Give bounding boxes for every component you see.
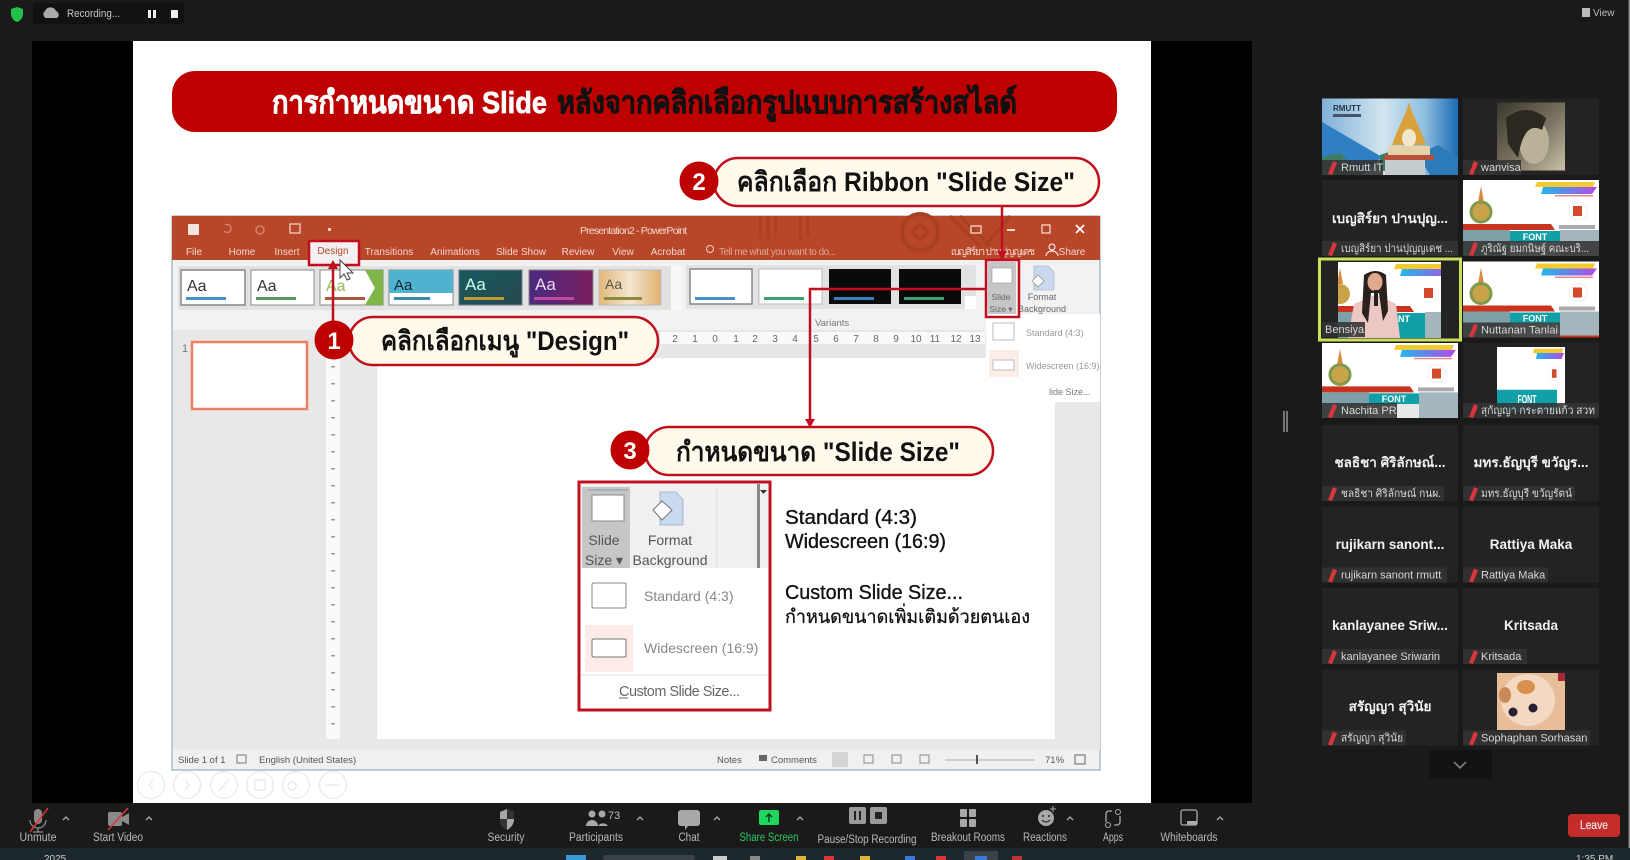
Slide size explanation text: กำหนดขนาดเพิ่มเติมด้วยตนเอง [785,603,1030,628]
horizontal ruler: 2 [672,334,678,345]
participant: sukanya: สุกัญญา กระตายแก้ว สวท [1481,405,1595,417]
cat photo [1497,673,1565,730]
participants button [569,810,643,844]
ribbon: Variants [815,318,849,329]
ribbon Slide Size button: Slide [992,292,1011,302]
participant: wanvisa: wanvisa [1480,162,1522,174]
title bar and tabs: Transitions [365,247,413,258]
red highlight around Slide Size button [986,260,1019,317]
title banner [172,71,1117,132]
step number 2: 2 [692,169,706,196]
horizontal ruler: 12 [950,334,962,345]
window controls [971,226,981,233]
participant: chonthicha: ชลธิชา ศิริลักษณ์... [1334,454,1446,470]
recording status chip [11,3,184,24]
theme thumbnails: Aa [535,275,556,294]
icon: pause [148,10,156,18]
variant thumbnails [690,269,976,309]
participants button: Participants [569,832,623,844]
icon: stop [171,10,178,18]
participant: Rattiya Maka: Rattiya Maka [1481,570,1546,582]
gallery next page button [1429,750,1492,779]
participants button: 73 [608,810,620,822]
Slide size explanation text: Widescreen (16:9) [785,531,946,553]
participant: Nachita PR: FONT [1382,394,1407,404]
chat button: Chat [678,832,700,844]
arrow: callout 1 to Design tab [328,260,338,325]
participant: Rmutt IT: RMUTT [1333,104,1361,113]
participant: rmutt thanyaburi: มทร.ธัญบุรี ขวัญรัตน์ [1481,487,1572,500]
title bar and tabs: View [612,247,635,258]
status bar: Slide 1 of 1 [178,755,226,766]
ribbon Format Background button [1018,266,1066,314]
ribbon Slide Size button: Size ▾ [989,304,1013,314]
security button [488,809,525,844]
theme thumbnails [181,270,661,305]
leave button: Leave [1580,820,1608,832]
callout 3: กำหนดขนาด "Slide Size" [676,437,960,467]
title bar and tabs: Home [229,247,256,258]
participant: phuritat [1463,180,1599,256]
title bar and tabs: Slide Show [496,247,547,258]
enlarged Slide Size menu [579,482,770,710]
reactions button: Reactions [1023,832,1067,844]
participant: Nuttanan Tanlai: FONT [1523,314,1548,324]
participant: kanlayanee Sriwarin: kanlayanee Sriw... [1332,618,1448,633]
horizontal ruler: 5 [813,334,819,345]
icon: save [188,224,199,235]
participant: kanlayanee Sriwarin [1322,588,1458,664]
slide size dropdown: lide Size... [1049,387,1091,397]
PowerPoint window screenshot [172,214,1100,770]
start video button [93,808,152,844]
theme thumbnails: Aa [465,275,486,294]
breakout rooms button: Breakout Rooms [931,832,1005,844]
shared screen area [32,41,1252,803]
participant: rujikarn sanont [1322,506,1458,582]
participant: chonthicha [1322,425,1458,501]
participant: phuritat: ภูริณัฐ ยมกนิษฐ์ คณะบริ... [1481,242,1589,255]
horizontal ruler: 6 [833,334,839,345]
slide size dropdown: Widescreen (16:9) [1026,361,1100,371]
icon: encryption shield [11,7,23,22]
share screen button [740,810,803,844]
participant: Nuttanan Tanlai: Nuttanan Tanlai [1481,324,1558,336]
title bar and tabs: Review [562,247,595,258]
slide size dropdown [986,314,1100,402]
step number 1: 1 [327,328,341,355]
title bar and tabs: Insert [274,247,300,258]
enlarged Slide Size menu: Custom Slide Size... [619,684,740,700]
security button: Security [488,832,525,844]
participant: rmutt thanyaburi [1463,425,1599,501]
title bar and tabs: File [186,247,202,258]
apps button: Apps [1103,832,1123,844]
horizontal ruler: 11 [930,334,941,345]
participant: Nachita PR [1322,343,1458,418]
participant: Bensiya (active speaker): NT [1398,314,1410,324]
theme thumbnails: Aa [187,278,207,295]
whiteboards button [1160,810,1223,844]
title banner: การกำหนดขนาด Slide [272,85,547,120]
ribbon [173,260,1099,330]
meeting toolbar [20,806,1620,846]
apps button [1103,810,1123,844]
status bar: Notes [717,755,742,766]
participant: chonthicha: ชลธิชา ศิริลักษณ์ กนผ. [1341,487,1441,500]
ribbon Format Background button: Format [1028,292,1057,302]
start video button: Start Video [93,832,143,844]
horizontal ruler: 1 [733,334,739,345]
whiteboards button: Whiteboards [1160,832,1218,844]
status bar [173,739,1099,769]
participant: Bensiya (active speaker) [1320,259,1460,340]
participant: Nachita PR: Nachita PR [1341,405,1397,417]
participant: Sophaphan Sorhasan: Sophaphan Sorhasan [1481,732,1587,744]
ribbon Format Background button: Background [1018,304,1066,314]
horizontal ruler: 9 [893,334,899,345]
horizontal ruler: 4 [792,334,798,345]
status bar: Comments [771,755,817,766]
horizontal ruler: 1 [692,334,698,345]
ribbon Slide Size button [988,262,1016,316]
arrow: Slide Size button to callout 3 [805,289,986,428]
participant: rujikarn sanont: rujikarn sanont... [1336,537,1444,552]
step number 1 [314,320,354,360]
Slide size explanation text [785,507,1030,628]
participant: Rattiya Maka [1463,506,1599,582]
step number 2 [680,162,718,200]
title bar and tabs: Animations [430,247,480,258]
status bar: 71% [1045,755,1065,766]
participant gallery [1320,98,1599,779]
Slide size explanation text: Custom Slide Size... [785,582,963,604]
callout 2 [680,158,1099,206]
pause and stop recording button: Pause/Stop Recording [818,834,916,846]
title bar and tabs: Share [1059,247,1086,258]
enlarged Slide Size menu: Standard (4:3) [644,588,734,604]
pause and stop recording button [818,807,916,846]
view button [1582,8,1615,19]
enlarged Slide Size menu: Widescreen (16:9) [644,640,758,656]
participant: Rattiya Maka: Rattiya Maka [1490,537,1573,552]
theme thumbnails: Aa [326,278,346,295]
theme thumbnails: Aa [394,277,413,294]
status bar: English (United States) [259,755,356,766]
window divider handle [1284,411,1287,432]
horizontal ruler: 8 [873,334,879,345]
arrow: callout 2 to Slide Size button [997,207,1007,260]
horizontal ruler: 10 [910,334,922,345]
callout 3 [610,427,993,475]
windows taskbar [0,848,1630,860]
enlarged Slide Size menu: Size ▾ [585,552,623,568]
participant: kanlayanee Sriwarin: kanlayanee Sriwarin [1341,651,1440,663]
share screen button: Share Screen [740,832,798,844]
participant: sukanya [1463,343,1599,418]
slide editing canvas [377,358,1055,739]
enlarged Slide Size menu: Background [632,552,708,568]
callout 1 [314,317,658,365]
participant: benjasiriya: เบญสิร์ยา ปานปุญญเดช ... [1341,242,1453,255]
participant: benjasiriya [1322,180,1458,256]
Design tab highlight: Design [317,246,349,257]
icon: mouse cursor [340,260,353,280]
title bar and tabs: Tell me what you want to do... [719,247,836,258]
step number 3: 3 [623,438,637,465]
participant: sukanya: FONT [1517,394,1537,407]
title bar and tabs [172,214,1100,260]
participant: Sophaphan Sorhasan [1463,670,1599,746]
title bar and tabs: เบญสิร์ยา ปานปุญญเดช [951,246,1035,258]
unmute button: Unmute [20,832,56,844]
participant: Kritsada [1463,588,1599,664]
chat button [678,810,720,844]
theme thumbnails: Aa [605,276,622,292]
slide thumbnail pane: 1 [182,343,188,355]
slide thumbnail pane [173,330,377,750]
participant: Kritsada: Kritsada [1481,651,1522,663]
participant: saranya suwinai: สรัญญา สุวินัย [1341,732,1403,744]
recording label: Recording... [67,8,120,20]
participant: rujikarn sanont: rujikarn sanont rmutt [1341,570,1441,582]
participant: saranya suwinai: สรัญญา สุวินัย [1349,699,1431,715]
title banner: หลังจากคลิกเลือกรูปแบบการสร้างสไลด์ [557,84,1017,122]
icon: format background [653,492,683,525]
theme thumbnails: Aa [257,278,277,295]
icon: recording cloud [43,7,59,18]
callout 1: คลิกเลือกเมนู "Design" [381,326,629,358]
view button: View [1593,8,1615,19]
participant: Rmutt IT: Rmutt IT [1341,162,1383,174]
participant: benjasiriya: เบญสิร์ยา ปานปุญ... [1332,210,1448,227]
participant: rmutt thanyaburi: มทร.ธัญบุรี ขวัญร... [1474,455,1588,471]
participant: phuritat: FONT [1523,232,1548,242]
presenter figure [1348,271,1400,338]
reactions button [1023,806,1073,844]
title bar and tabs: Presentation2 - PowerPoint [580,225,687,237]
participant: Kritsada: Kritsada [1504,618,1558,633]
horizontal ruler: 0 [712,334,718,345]
participant: wanvisa [1463,98,1599,175]
horizontal ruler: 3 [772,334,778,345]
enlarged Slide Size menu: Format [648,532,692,548]
leave button [1568,814,1620,837]
participant: Bensiya (active speaker): Bensiya [1325,324,1365,336]
participant: Nuttanan Tanlai [1463,262,1599,338]
presentation controls [138,772,346,798]
participant: saranya suwinai [1322,670,1458,746]
title bar and tabs: Acrobat [651,247,685,258]
callout 2: คลิกเลือก Ribbon "Slide Size" [737,167,1075,197]
enlarged Slide Size menu: Slide [588,532,620,548]
participant: Rmutt IT [1322,98,1458,175]
horizontal ruler: 2 [752,334,758,345]
step number 3 [610,430,650,470]
unmute button [20,808,69,844]
shared slide [133,41,1151,803]
slide size dropdown: Standard (4:3) [1026,328,1084,338]
vertical ruler [326,358,340,740]
horizontal ruler: 13 [969,334,981,345]
breakout rooms button [931,809,1005,844]
horizontal ruler: 7 [853,334,859,345]
Design tab highlight [309,241,359,265]
Slide size explanation text: Standard (4:3) [785,507,917,529]
horizontal ruler [173,330,985,358]
